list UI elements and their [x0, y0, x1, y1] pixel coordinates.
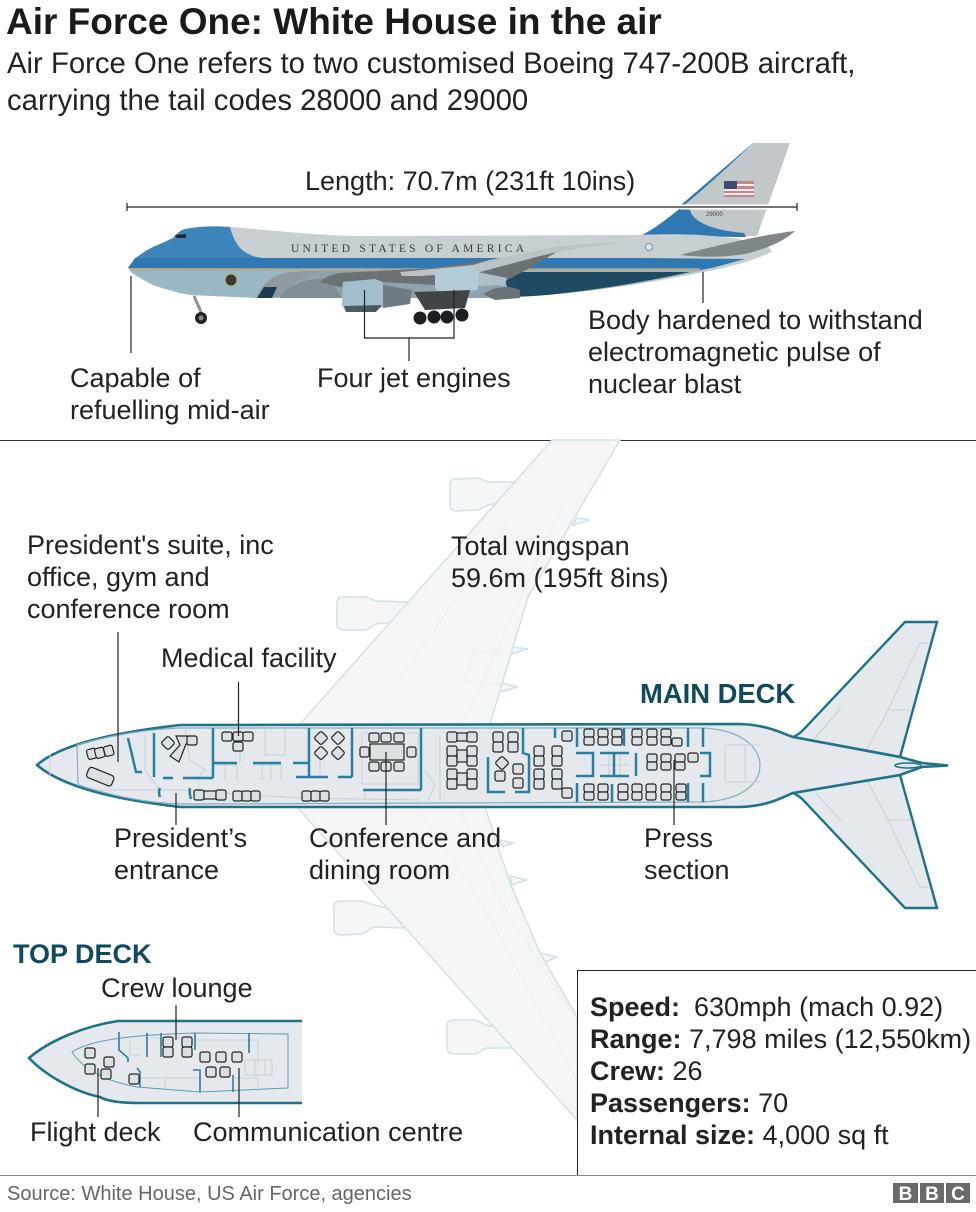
- callout: body hardened: electromagnetic pulse of: [588, 337, 881, 367]
- length dimension: Length: 70.7m (231ft 10ins): [305, 166, 635, 196]
- callout: body hardened: Body hardened to withstand: [588, 305, 923, 335]
- upper wing: [300, 440, 620, 724]
- callout: flight deck: Flight deck: [30, 1117, 161, 1147]
- callout: president's suite: President's suite, inc: [27, 530, 274, 560]
- aircraft side view: [128, 143, 795, 324]
- main deck plan: [37, 622, 948, 908]
- callout: wingspan: 59.6m (195ft 8ins): [451, 563, 669, 593]
- heading: main deck: MAIN DECK: [640, 678, 795, 709]
- callout: press section: section: [644, 855, 730, 885]
- callout: wingspan: Total wingspan: [451, 531, 630, 561]
- fuselage: [128, 226, 772, 298]
- presidential seal: [225, 274, 237, 286]
- callout: president's suite: conference room: [27, 594, 230, 624]
- wing: [320, 242, 623, 287]
- callout: president's entrance: President’s: [114, 823, 247, 853]
- wing fairing: [257, 271, 320, 297]
- callout: conference room: dining room: [309, 855, 450, 885]
- president's suite furniture: [86, 736, 197, 787]
- callout: communication centre: Communication centre: [193, 1117, 463, 1147]
- subtitle: carrying the tail codes 28000 and 29000: [7, 84, 528, 117]
- fuselage outline: [37, 724, 948, 807]
- inner engine: [435, 266, 507, 294]
- interior walls: [128, 728, 710, 802]
- callout: press section: [644, 760, 730, 885]
- stats panel: Passengers: 70: [590, 1088, 788, 1118]
- outer engine: [342, 279, 412, 312]
- callout: conference room: Conference and: [309, 823, 501, 853]
- BBC logo: C: [951, 1184, 965, 1205]
- tail fin: [640, 143, 790, 237]
- inner cabin: [72, 1033, 288, 1092]
- tailplane lower: [793, 775, 937, 908]
- callout: president's entrance: entrance: [114, 855, 219, 885]
- cabin wall: [77, 728, 760, 804]
- callout: president's suite: office, gym and: [27, 562, 210, 592]
- lower row seats: [194, 790, 329, 801]
- lower body: [128, 268, 704, 298]
- subtitle: Air Force One refers to two customised Boeing 747-200B aircraft,: [7, 47, 855, 80]
- staff seating: [447, 731, 572, 798]
- landing gear: [194, 290, 470, 324]
- hull: [29, 1021, 302, 1103]
- lounge diamonds: [314, 731, 345, 760]
- callout: president's suite: [27, 530, 274, 762]
- flag: [724, 181, 754, 197]
- faint interior detail: [50, 728, 760, 800]
- callout: body hardened: [588, 272, 923, 399]
- callout: president's entrance: [114, 793, 247, 885]
- stats panel: Range: 7,798 miles (12,550km): [590, 1024, 971, 1054]
- stats panel: [578, 970, 976, 1176]
- roundel: [646, 244, 652, 250]
- wings background: [297, 440, 620, 1120]
- BBC logo: B: [899, 1184, 912, 1205]
- stats panel: Crew: 26: [590, 1056, 703, 1086]
- tailplane upper: [793, 622, 937, 757]
- callout: press section: Press: [644, 823, 713, 853]
- BBC logo: B: [925, 1184, 939, 1205]
- callout: engines: Four jet engines: [317, 363, 511, 393]
- heading: top deck: TOP DECK: [13, 939, 152, 969]
- lower wing: [297, 807, 577, 1120]
- seats: [85, 1037, 242, 1084]
- length dimension: [127, 166, 797, 211]
- dark belly: [505, 272, 690, 297]
- callout: crew lounge: Crew lounge: [101, 973, 253, 1003]
- top deck plan: [29, 1021, 302, 1103]
- BBC logo: [893, 1183, 970, 1205]
- callout: medical facility: Medical facility: [161, 643, 337, 673]
- callout: flight deck: [30, 1068, 161, 1147]
- callout: refuelling: Capable of: [70, 363, 201, 393]
- blue cheatline: [128, 258, 745, 270]
- cockpit window: [175, 234, 186, 238]
- stats panel: Internal size: 4,000 sq ft: [590, 1120, 889, 1150]
- tailplane: [680, 231, 795, 257]
- callout: conference room: [309, 752, 501, 885]
- source: Source: White House, US Air Force, agencies: [7, 1183, 412, 1205]
- United States of America: UNITED STATES OF AMERICA: [291, 243, 525, 255]
- callout: refuelling: [70, 276, 270, 425]
- subtitle: [7, 47, 855, 117]
- blue nose cap: [128, 226, 262, 268]
- callout: engines: [317, 290, 511, 393]
- conference table: [360, 733, 416, 771]
- tail code: 29000: [706, 212, 723, 218]
- stats panel: 630mph (mach 0.92): [694, 992, 943, 1022]
- title: Air Force One: White House in the air: [6, 1, 662, 42]
- callout: wingspan: [451, 531, 669, 593]
- press seating: [584, 729, 698, 800]
- medical facility seats: [222, 732, 253, 751]
- callout: refuelling: refuelling mid-air: [70, 395, 270, 425]
- callout: body hardened: nuclear blast: [588, 369, 742, 399]
- rear fairing: [483, 287, 520, 300]
- stats panel: Speed:: [590, 992, 680, 1022]
